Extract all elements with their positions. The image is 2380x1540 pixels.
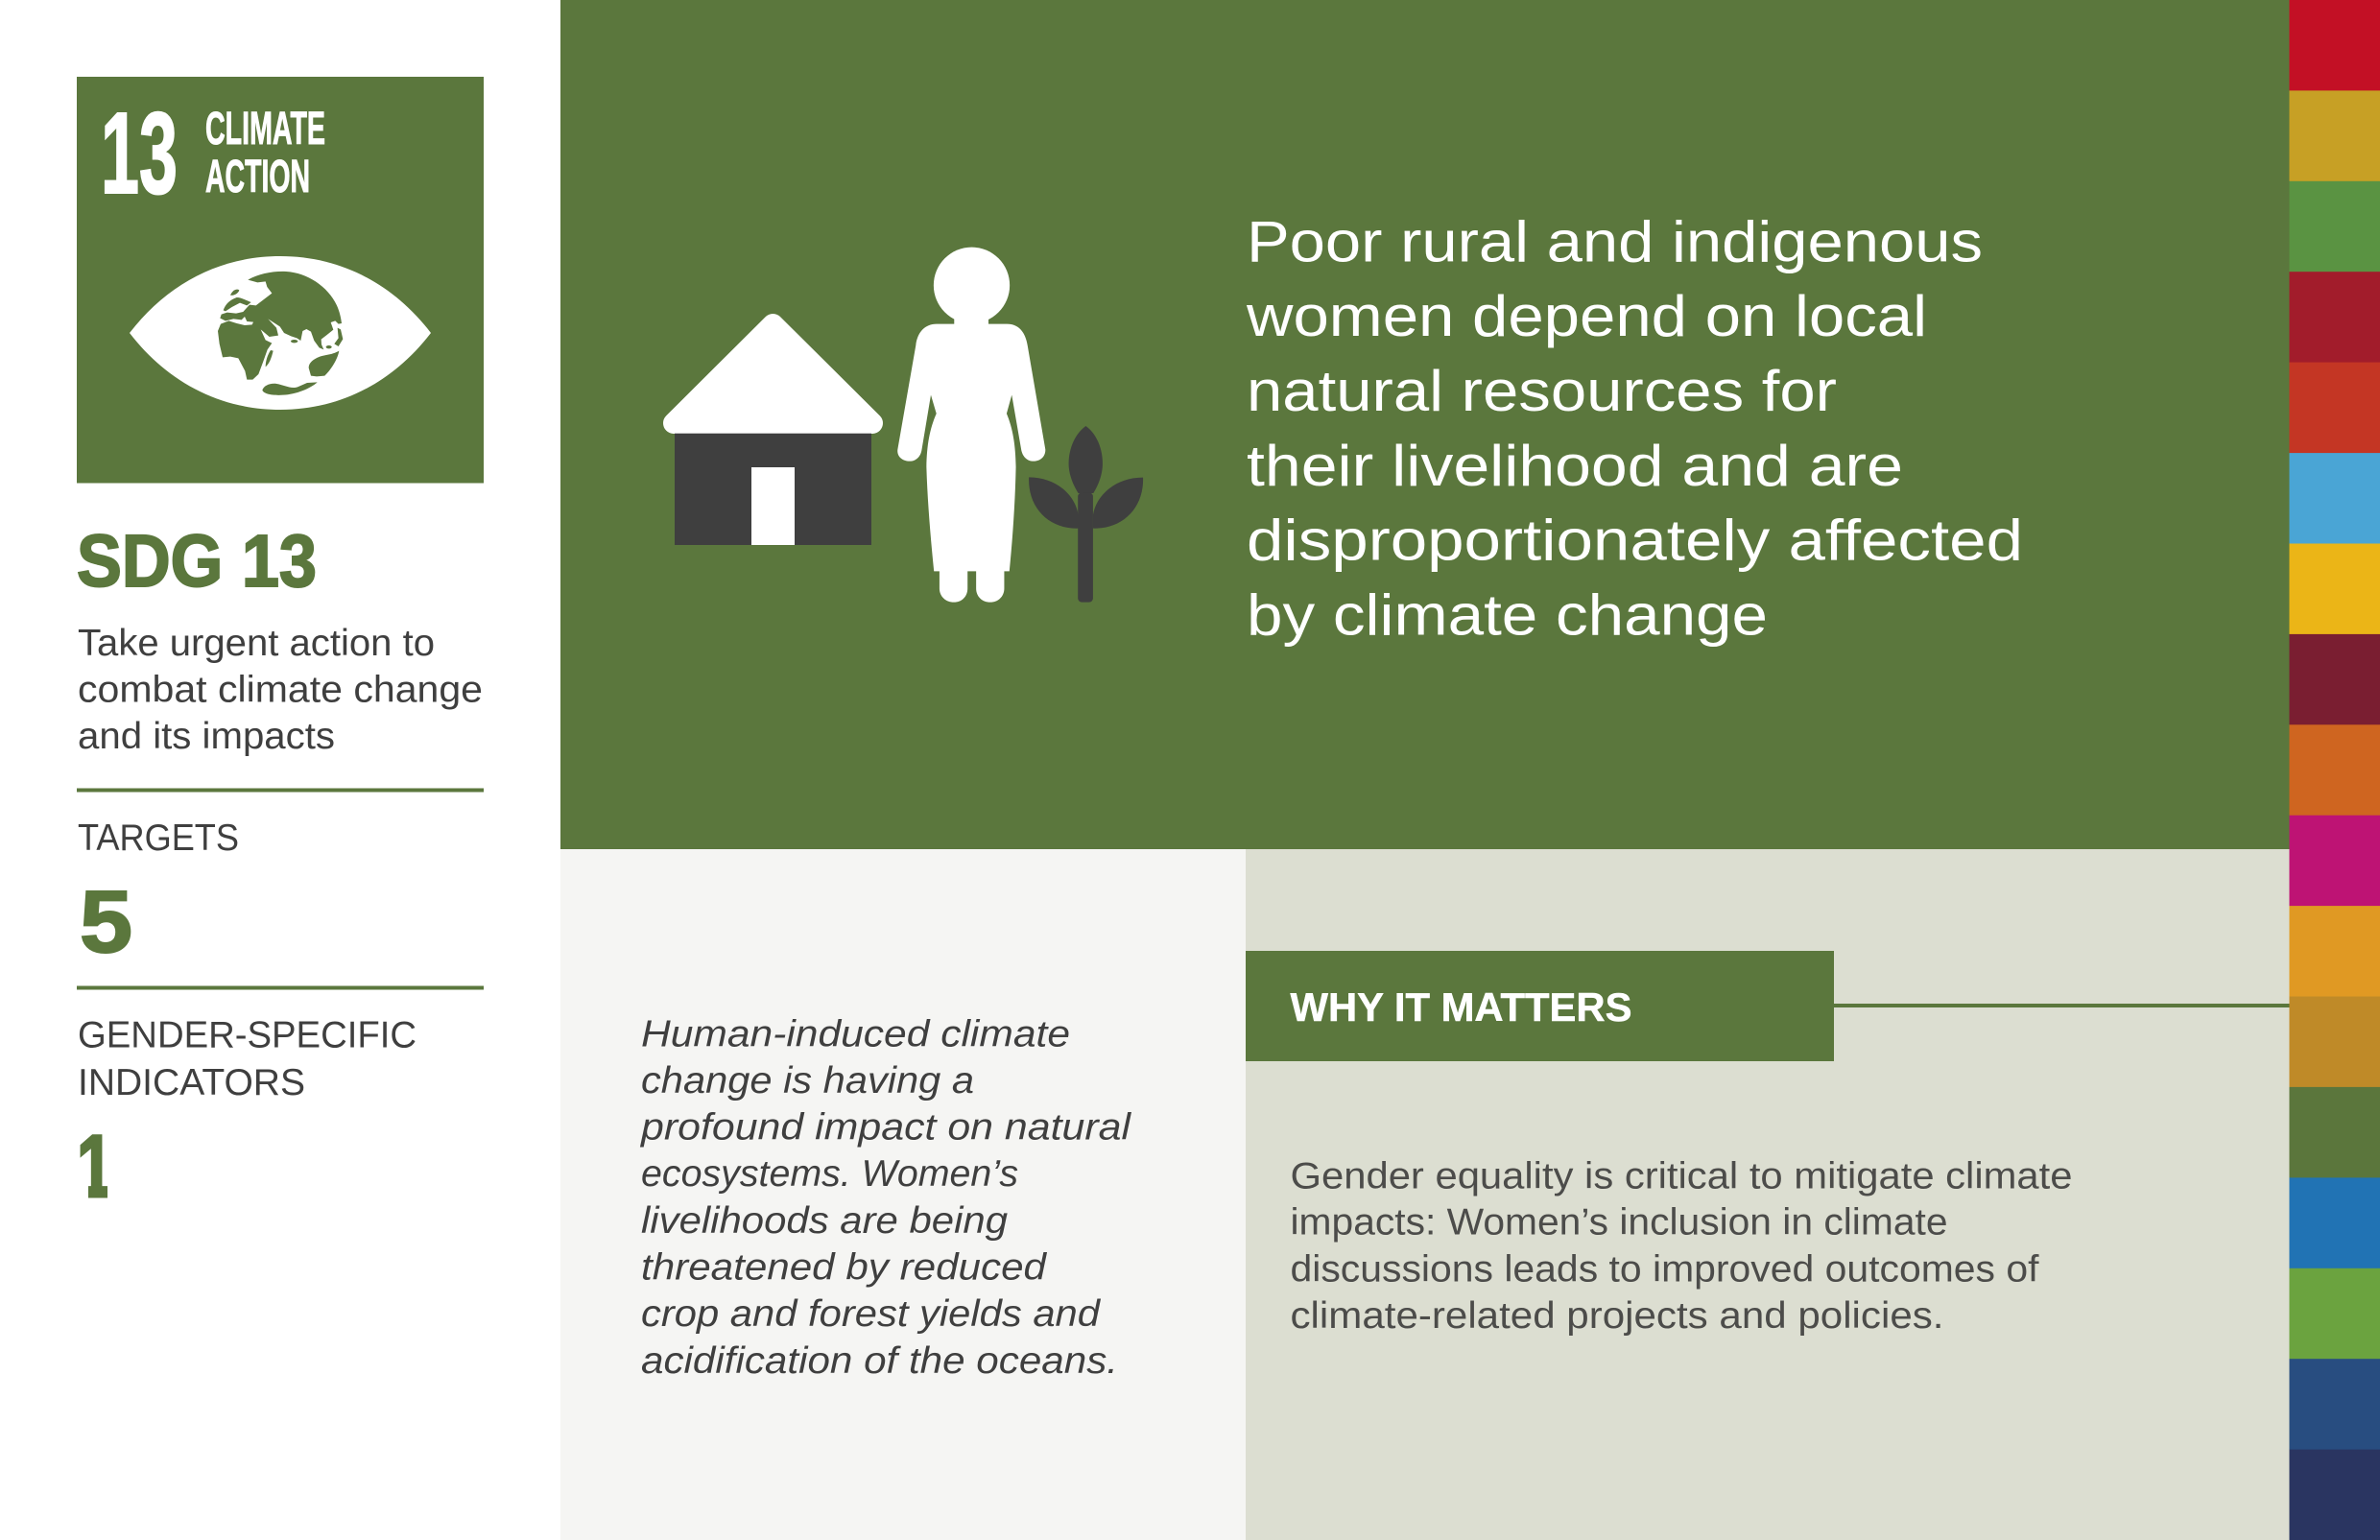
panel: why it matters background [1246, 849, 2290, 1540]
italic context paragraph: acidification of the oceans. [641, 1340, 1118, 1382]
sidebar description: combat climate change [78, 670, 483, 710]
gender-specific indicators label [78, 1015, 416, 1103]
panel: headline background [560, 0, 2290, 849]
headline text: Poor rural and indigenous [1247, 209, 1983, 274]
sidebar heading: SDG 13: SDG 13 [77, 520, 317, 603]
illustration: house, woman, plant [674, 248, 1143, 603]
gender-specific indicators label: GENDER-SPECIFIC [78, 1015, 416, 1055]
headline text: women depend on local [1246, 284, 1927, 348]
headline text: disproportionately affected [1247, 509, 2023, 573]
sidebar description: and its impacts [78, 716, 335, 757]
italic context paragraph: change is having a [641, 1060, 974, 1102]
badge title: ACTION [205, 152, 310, 202]
italic context paragraph: crop and forest yields and [641, 1293, 1101, 1335]
SDG colour stripe [2290, 0, 2380, 1540]
italic context paragraph: livelihoods are being [641, 1200, 1008, 1242]
badge number: 13 [101, 87, 178, 218]
gender-specific indicators label: INDICATORS [78, 1062, 305, 1103]
targets label: TARGETS [78, 817, 239, 859]
sidebar description: Take urgent action to [78, 623, 435, 664]
badge title [205, 104, 325, 202]
headline text: by climate change [1247, 582, 1768, 647]
italic context paragraph [640, 1013, 1131, 1382]
why it matters paragraph: impacts: Women’s inclusion in climate [1290, 1202, 1948, 1244]
why it matters paragraph: discussions leads to improved outcomes of [1290, 1249, 2039, 1290]
panel: context background [560, 849, 1246, 1540]
indicators value: 1 [77, 1118, 113, 1216]
sidebar description [78, 623, 483, 757]
icon: woman [897, 248, 1045, 603]
icon: house [674, 324, 872, 545]
headline text [1246, 209, 2023, 647]
headline text: their livelihood and are [1247, 434, 1903, 498]
badge title: CLIMATE [205, 104, 325, 154]
targets value: 5 [80, 873, 132, 971]
icon: eye with globe [130, 256, 431, 410]
why it matters tab [1246, 951, 1834, 1061]
why it matters paragraph [1290, 1155, 2073, 1337]
italic context paragraph: threatened by reduced [641, 1246, 1047, 1288]
icon: plant [1029, 426, 1143, 603]
italic context paragraph: profound impact on natural [640, 1107, 1131, 1149]
headline text: natural resources for [1247, 359, 1837, 423]
SDG 13 badge [77, 77, 484, 484]
why it matters paragraph: Gender equality is critical to mitigate climate [1290, 1155, 2073, 1196]
italic context paragraph: Human-induced climate [641, 1013, 1070, 1054]
why it matters tab: WHY IT MATTERS [1290, 984, 1631, 1030]
why it matters paragraph: climate-related projects and policies. [1290, 1295, 1944, 1337]
italic context paragraph: ecosystems. Women’s [641, 1153, 1018, 1195]
